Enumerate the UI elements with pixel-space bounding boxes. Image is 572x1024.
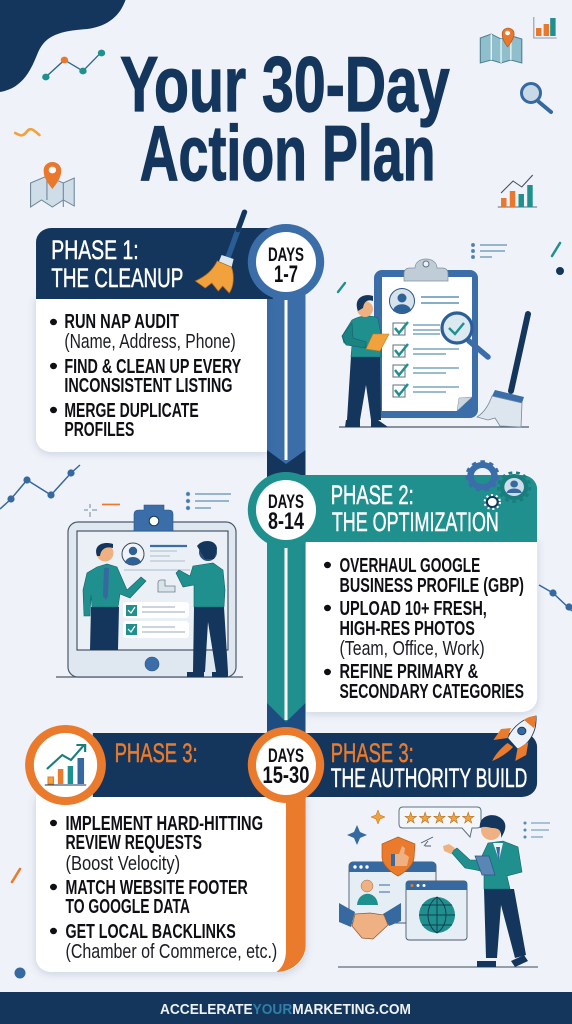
phase 1 bullets: INCONSISTENT LISTING xyxy=(64,375,233,397)
icon: line chart top left xyxy=(42,50,105,80)
badge: days 8-14: 8-14 xyxy=(268,508,304,535)
phase 3 bullets xyxy=(50,813,277,963)
phase 2 bullets xyxy=(324,555,524,703)
phase 2 body xyxy=(306,540,537,712)
footer url: ACCELERATEYOURMARKETING.COM xyxy=(160,1002,411,1018)
badge: days 15-30 xyxy=(248,727,324,803)
phase 2 heading xyxy=(331,479,499,537)
icon: map with pin left xyxy=(31,162,74,207)
phase 3 right heading: PHASE 3: xyxy=(331,737,414,768)
decorative line chart left xyxy=(0,465,80,509)
panel: phase 2 xyxy=(248,462,537,712)
illustration: reviews, handshake and consultant xyxy=(338,807,538,967)
phase 2 bullets: (Team, Office, Work) xyxy=(339,638,485,660)
illustration: tablet with two people xyxy=(56,505,243,677)
badge: days 1-7: 1-7 xyxy=(274,261,298,288)
phase 3 bullets: GET LOCAL BACKLINKS xyxy=(65,921,236,943)
badge: days 1-7 xyxy=(248,224,324,300)
phase 1 header xyxy=(36,228,273,299)
phase 1 bullets: FIND & CLEAN UP EVERY xyxy=(64,356,241,378)
phase 1 heading xyxy=(51,234,183,293)
accent marks bottom left xyxy=(12,869,26,978)
phase 1 heading: PHASE 1: xyxy=(51,234,139,265)
icon: list lines top middle xyxy=(472,244,507,258)
phase 1 bullets: PROFILES xyxy=(64,419,134,441)
phase 1 body xyxy=(36,296,267,452)
phase 2 bullets: REFINE PRIMARY & xyxy=(339,661,478,683)
phase 1 bullets: MERGE DUPLICATE xyxy=(64,400,199,422)
illustration: reviews, handshake and consultant: ★★★★★ xyxy=(404,810,475,827)
icon: rocket xyxy=(492,716,536,761)
badge: days 15-30: DAYS xyxy=(268,746,304,767)
phase 3 bullets: MATCH WEBSITE FOOTER xyxy=(65,877,248,899)
phase 3 timeline strip xyxy=(276,795,306,972)
small accent marks xyxy=(338,243,564,292)
icon: gears xyxy=(467,462,530,509)
phase 3 bullets: (Chamber of Commerce, etc.) xyxy=(65,941,277,963)
badge: days 15-30: 15-30 xyxy=(263,762,309,789)
icon: small bar chart top right xyxy=(534,17,557,38)
accent marks above tablet xyxy=(84,504,120,517)
phase 2 bullets: HIGH-RES PHOTOS xyxy=(339,618,475,640)
badge: days 8-14: DAYS xyxy=(268,492,304,513)
timeline column: phase 1 segment xyxy=(267,290,306,480)
phase 3 bullets: REVIEW REQUESTS xyxy=(65,832,202,854)
icon: list lines bottom right xyxy=(524,822,550,838)
phase 1 bullets: (Name, Address, Phone) xyxy=(64,331,236,353)
icon: growth chart right xyxy=(498,175,537,207)
timeline column: phase 2 segment xyxy=(267,480,306,740)
illustration: clipboard with person and broom xyxy=(339,259,529,427)
phase 2 bullets: UPLOAD 10+ FRESH, xyxy=(339,598,487,620)
phase 2 heading: PHASE 2: xyxy=(331,479,414,510)
decorative corner blob xyxy=(0,0,126,92)
badge: days 8-14 xyxy=(248,472,324,548)
phase 3 header bar xyxy=(93,733,537,797)
panel: phase 1 xyxy=(36,212,324,452)
phase 3 bullets: (Boost Velocity) xyxy=(65,853,180,875)
phase 2 header xyxy=(295,475,537,542)
phase 3 left heading: PHASE 3: xyxy=(115,737,198,768)
icon: list lines middle left xyxy=(186,492,231,510)
phase 1 heading: THE CLEANUP xyxy=(51,262,183,293)
phase 2 bullets: OVERHAUL GOOGLE xyxy=(339,555,480,577)
phase 3 body xyxy=(36,795,306,972)
icon: magnifier top right xyxy=(522,84,551,112)
icon: broom xyxy=(195,212,245,293)
phase 1 bullets: RUN NAP AUDIT xyxy=(64,311,179,333)
phase 1 bullets xyxy=(50,311,241,441)
badge: days 1-7: DAYS xyxy=(268,245,304,266)
badge: chart icon xyxy=(25,725,106,805)
footer bar xyxy=(0,992,572,1024)
decorative line chart right xyxy=(539,585,572,611)
phase 3 bullets: IMPLEMENT HARD-HITTING xyxy=(65,813,263,835)
phase 3 right heading xyxy=(331,737,527,793)
icon: orange squiggle xyxy=(15,129,39,135)
panel: phase 3 xyxy=(25,716,537,972)
phase 3 bullets: TO GOOGLE DATA xyxy=(65,896,190,918)
title xyxy=(120,41,450,197)
icon: map with pin right xyxy=(480,28,522,63)
